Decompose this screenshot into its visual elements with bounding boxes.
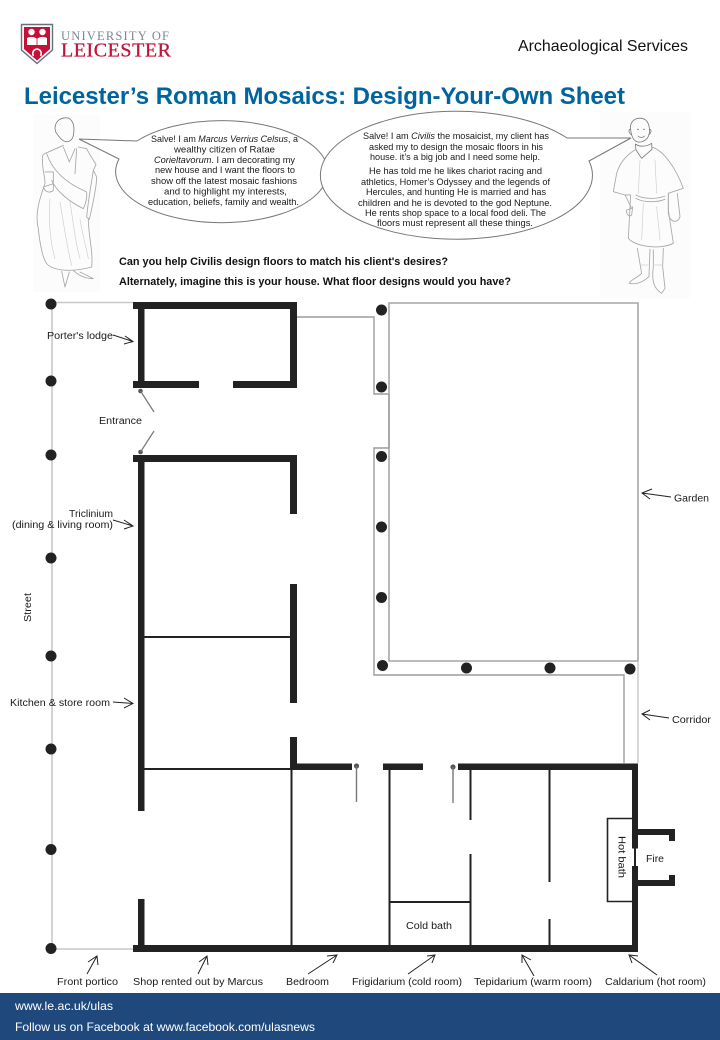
- logo wordmark top: UNIVERSITY OF: [61, 29, 169, 43]
- label: Caldarium: Caldarium (hot room): [605, 977, 706, 988]
- speech bubble: Civilis: Hercules, and hunting He is married and has: [366, 186, 546, 197]
- label: Bedroom: [286, 955, 337, 988]
- furnace walls: [638, 829, 675, 886]
- label: Corridor: Corridor: [672, 715, 712, 726]
- label: Garden: Garden: [674, 494, 709, 504]
- label: Street: Street: [23, 593, 34, 622]
- label: Entrance: Entrance: [99, 416, 142, 427]
- label: Garden: [642, 489, 709, 504]
- corridor outline: [297, 317, 624, 763]
- room: porter's lodge walls: [133, 302, 297, 388]
- speech bubble: Marcus: Salve! I am Marcus Verrius Celsus, a: [151, 133, 299, 144]
- room: west range walls: [133, 455, 297, 946]
- speech bubble: Civilis: athletics, Homer’s Odyssey and the legends of: [361, 176, 550, 187]
- speech bubble: Marcus: wealthy citizen of Ratae: [173, 144, 275, 154]
- doors: [138, 389, 456, 803]
- speech bubble: Civilis: He has told me he likes chariot racing and: [369, 165, 542, 176]
- label: Fire: Fire: [646, 854, 664, 865]
- speech bubble: Marcus: new house and I want the floors to: [155, 164, 295, 175]
- label: Porter's lodge: [47, 331, 133, 344]
- logo: University of Leicester: [22, 24, 172, 64]
- label: Hot bath: Hot bath: [616, 836, 626, 878]
- label: Cold bath: Cold bath: [406, 921, 452, 932]
- label: Bedroom: Bedroom: [286, 977, 329, 988]
- label: Triclinium: (dining & living room): [12, 520, 113, 531]
- label: Kitchen and store room: Kitchen & store room: [10, 698, 110, 709]
- label: Front portico: [57, 956, 118, 988]
- footer Facebook link: Follow us on Facebook at www.facebook.com/ulasnews: [15, 1020, 315, 1034]
- label: Shop rented out by Marcus: Shop rented out by Marcus: [133, 977, 263, 988]
- floor plan: [46, 298, 675, 954]
- garden outline: [389, 303, 638, 661]
- speech bubble: Marcus: [79, 121, 328, 223]
- question: design floors: Can you help Civilis design floors to match his client's desires?: [119, 256, 448, 268]
- icon: shield: [22, 24, 52, 64]
- speech bubble: Civilis: [320, 111, 631, 239]
- label: Frigidarium: [352, 955, 462, 988]
- label: Triclinium: [12, 509, 133, 531]
- label: Front portico: Front portico: [57, 977, 118, 988]
- columns: [46, 298, 636, 954]
- speech bubble: Marcus: and to highlight my interests,: [164, 186, 287, 196]
- question: your house: Alternately, imagine this is your house. What floor designs would you have?: [119, 276, 511, 288]
- label: Triclinium: Triclinium: [69, 509, 113, 520]
- label: Caldarium: [605, 955, 706, 988]
- speech bubble: Civilis: He rents shop space to a local food deli. The: [365, 207, 546, 218]
- speech bubble: Civilis: house. it’s a big job and I need some help.: [370, 151, 540, 162]
- speech bubble: Civilis: children and he is devoted to the god Neptune.: [358, 197, 552, 208]
- label: Porter's lodge: Porter's lodge: [47, 331, 113, 342]
- label: Tepidarium: Tepidarium (warm room): [474, 977, 592, 988]
- title: Leicester’s Roman Mosaics: Design-Your-Own Sheet: [24, 83, 625, 110]
- bath suite walls: [291, 764, 638, 952]
- south wall: [133, 945, 638, 952]
- footer website link: www.le.ac.uk/ulas: [14, 999, 113, 1013]
- label: Frigidarium: Frigidarium (cold room): [352, 977, 462, 988]
- speech bubble: Civilis: floors must represent all these things.: [377, 217, 533, 228]
- speech bubble: Marcus: Corieltavorum. I am decorating my: [154, 154, 295, 165]
- speech bubble: Civilis: asked my to design the mosaic floors in his: [369, 141, 543, 152]
- department name: Archaeological Services: [518, 38, 688, 55]
- footer band: [0, 993, 720, 1040]
- label: Corridor: [642, 710, 712, 726]
- street frontage line: [52, 302, 133, 949]
- hot bath: [608, 818, 632, 902]
- logo wordmark bottom: LEICESTER: [61, 40, 172, 62]
- speech bubble: Civilis: Salve! I am Civilis the mosaicist, my client has: [363, 130, 549, 141]
- illustration: Marcus Verrius Celsus: [33, 115, 100, 292]
- speech bubble: Marcus: show off the latest mosaic fashions: [151, 175, 297, 186]
- label: Tepidarium: [474, 955, 592, 988]
- illustration: Civilis the mosaicist: [600, 112, 690, 298]
- label: Shop rented out by Marcus: [133, 956, 263, 988]
- speech bubble: Marcus: education, beliefs, family and wealth.: [148, 196, 299, 207]
